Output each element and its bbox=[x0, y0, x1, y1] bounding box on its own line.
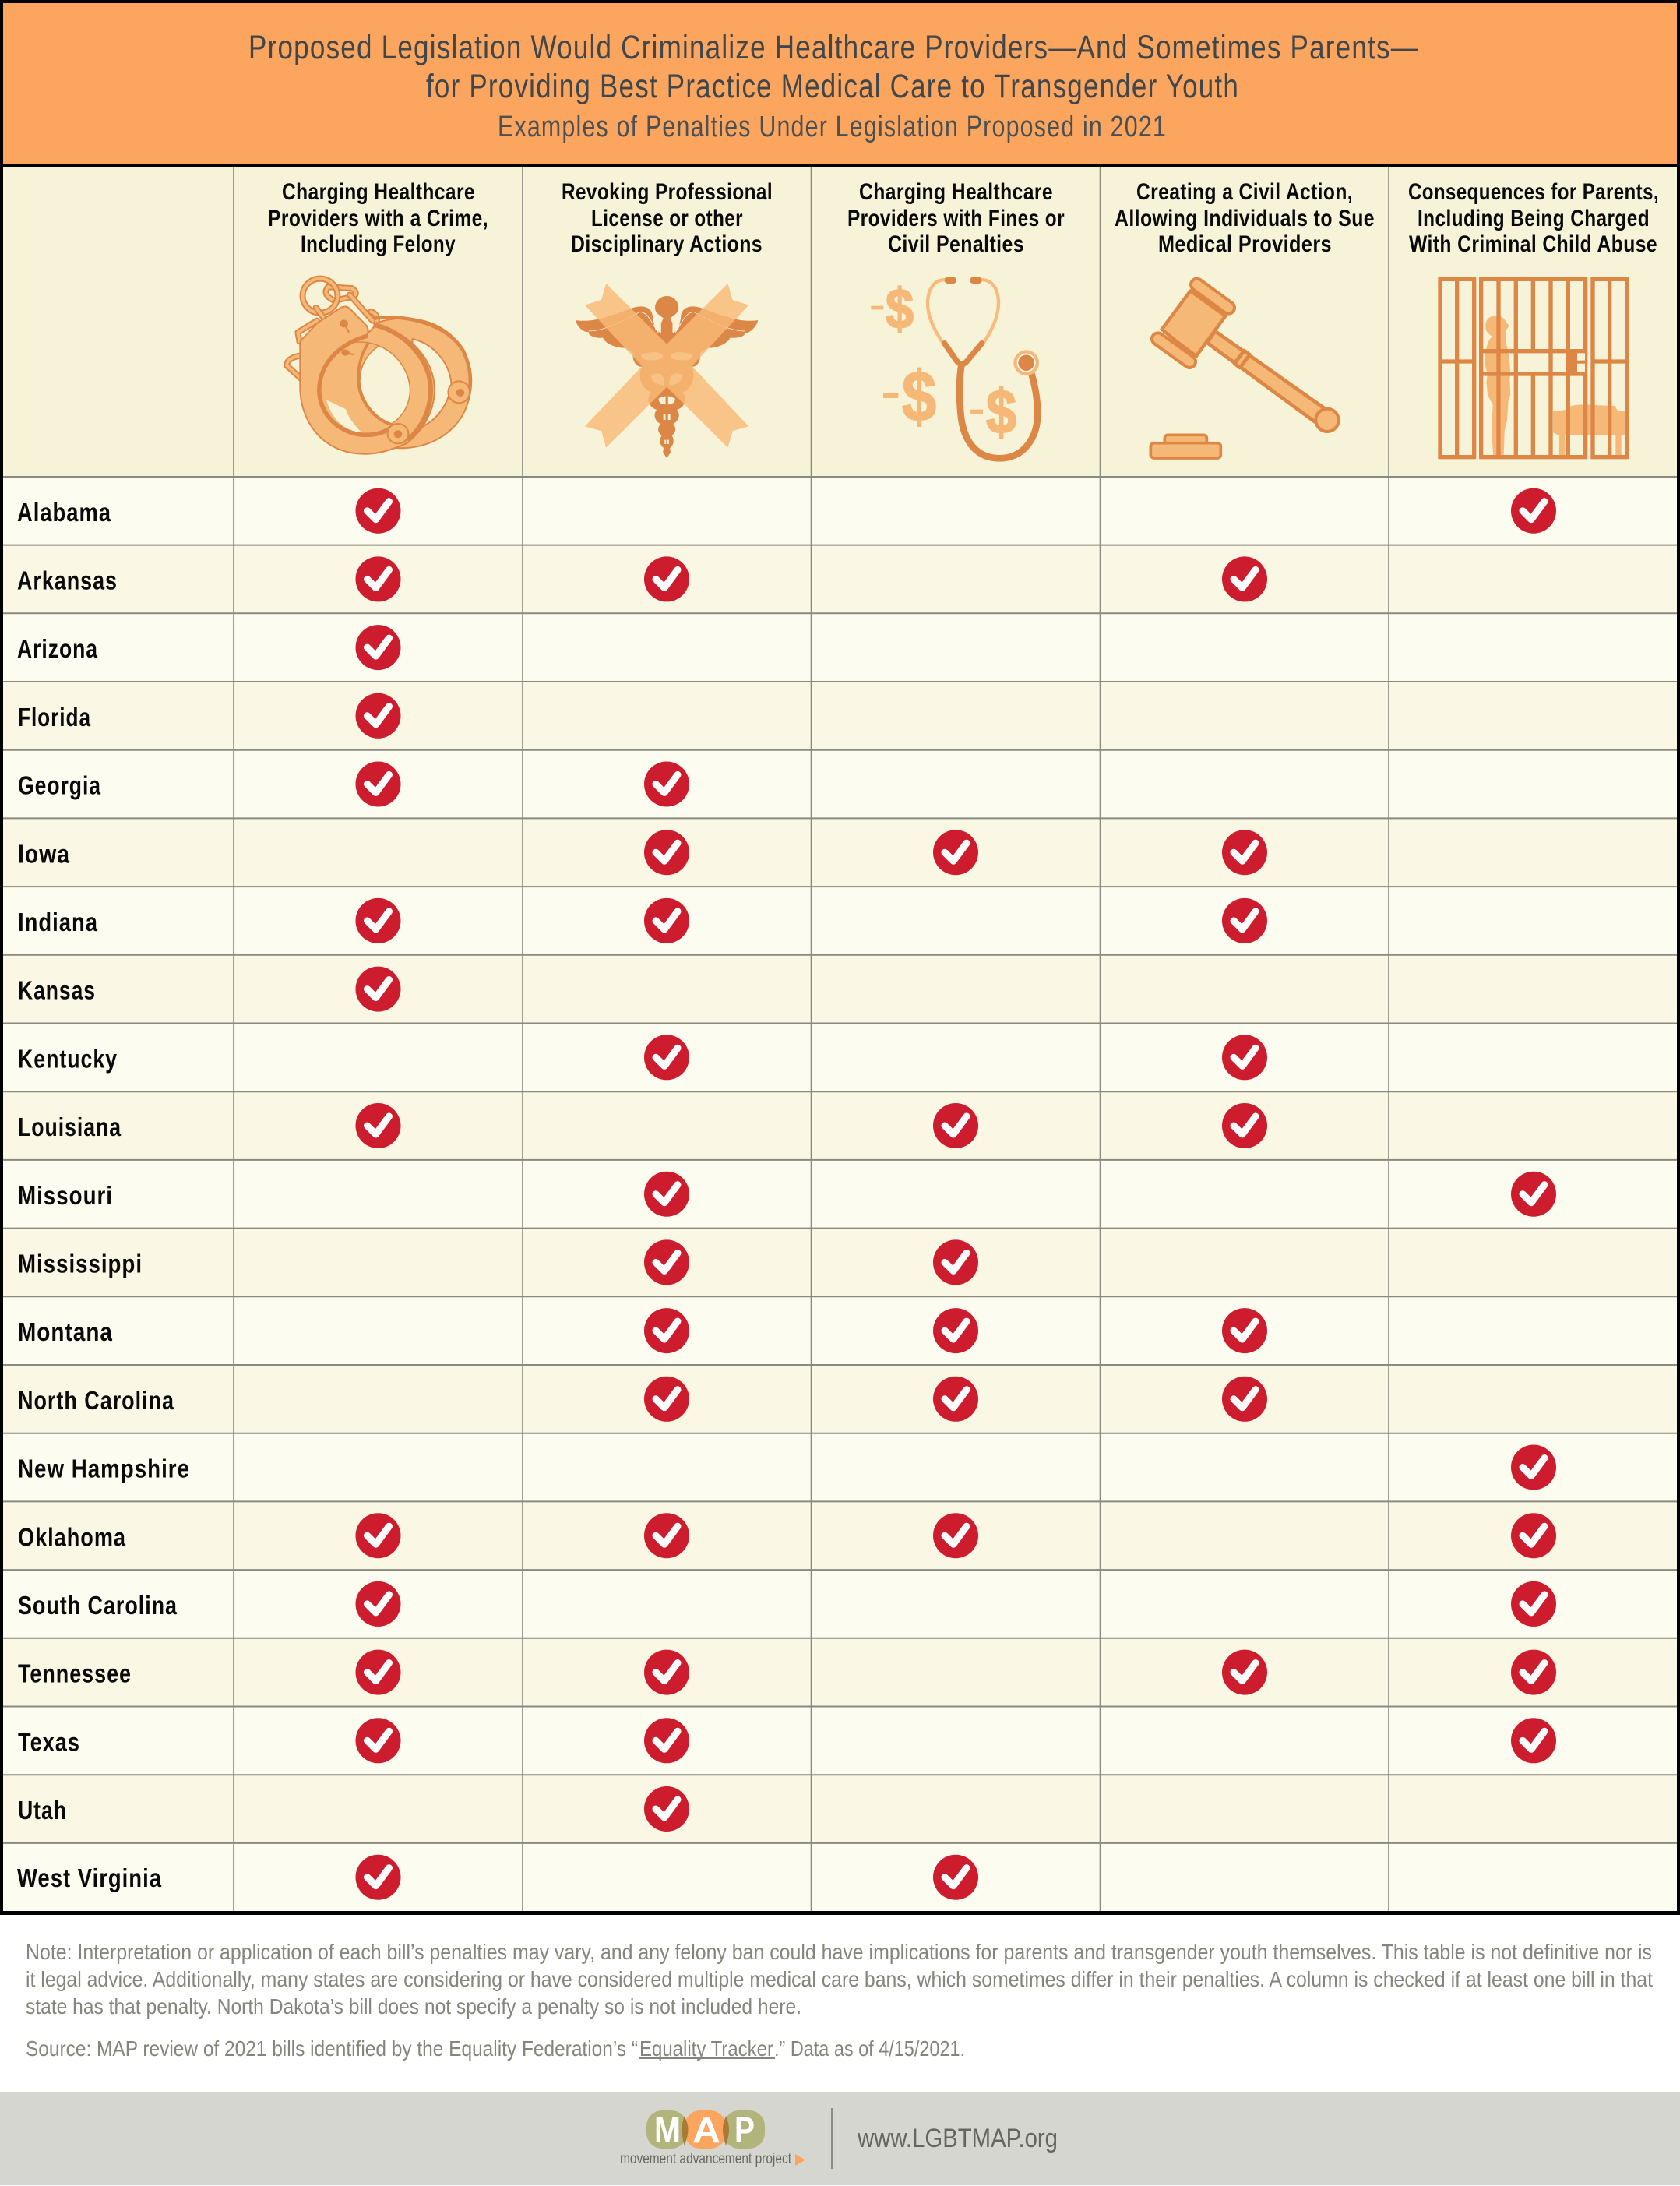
row: Oklahoma: Oklahoma bbox=[18, 1522, 126, 1551]
text block: note: state has that penalty. North Dakota’s bill does not specify a penalty so is not included here. bbox=[26, 1994, 801, 2019]
row: Kansas: Kansas bbox=[18, 976, 96, 1005]
row: Arkansas bbox=[17, 556, 1267, 601]
heading: fines or civil penalties: Providers with Fines or bbox=[847, 206, 1065, 231]
row: Arizona: Arizona bbox=[17, 634, 98, 663]
row: North Carolina: North Carolina bbox=[18, 1386, 174, 1415]
row: Florida bbox=[18, 693, 400, 739]
logo: MAP bbox=[620, 2110, 805, 2167]
row: Montana: Montana bbox=[18, 1317, 113, 1346]
icon: stethoscope with dollar signs: $ bbox=[902, 358, 936, 436]
row: Tennessee bbox=[18, 1650, 1556, 1695]
heading: charging with a crime: Charging Healthcare bbox=[282, 179, 475, 205]
heading: fines or civil penalties: Charging Healthcare bbox=[859, 179, 1053, 205]
icon: jail cell bbox=[1440, 279, 1627, 457]
heading: consequences for parents bbox=[1408, 179, 1659, 257]
icon: stethoscope with dollar signs: $ bbox=[986, 377, 1016, 446]
row: New Hampshire: New Hampshire bbox=[18, 1454, 190, 1483]
text block: source: .” Data as of 4/15/2021. bbox=[774, 2036, 965, 2061]
row: Oklahoma bbox=[18, 1513, 1556, 1558]
panel: title banner bbox=[0, 0, 1680, 167]
title: for Providing Best Practice Medical Care to Transgender Youth bbox=[426, 68, 1239, 105]
icon: stethoscope with dollar signs bbox=[871, 277, 1039, 458]
row: Mississippi bbox=[18, 1239, 978, 1285]
row: Kansas bbox=[18, 967, 400, 1012]
X overlay bbox=[585, 284, 748, 448]
row: South Carolina: South Carolina bbox=[18, 1591, 178, 1620]
row: Georgia: Georgia bbox=[18, 771, 101, 800]
icon: stethoscope with dollar signs: $ bbox=[886, 278, 914, 340]
heading: civil action: Allowing Individuals to Sue bbox=[1115, 206, 1375, 231]
row: West Virginia bbox=[17, 1855, 978, 1900]
row: Florida: Florida bbox=[18, 703, 91, 732]
heading: charging with a crime bbox=[268, 179, 488, 257]
row: West Virginia: West Virginia bbox=[17, 1863, 162, 1892]
row: Arkansas: Arkansas bbox=[17, 566, 118, 595]
row: Louisiana bbox=[18, 1103, 1267, 1148]
row: Texas: Texas bbox=[18, 1727, 80, 1756]
row: Iowa bbox=[18, 830, 1267, 875]
row: Utah: Utah bbox=[18, 1796, 67, 1825]
heading: civil action bbox=[1115, 179, 1375, 257]
heading: revoking license bbox=[562, 179, 773, 257]
title: Proposed Legislation Would Criminalize Healthcare Providers—And Sometimes Parents— bbox=[248, 29, 1419, 66]
heading: fines or civil penalties: Civil Penalties bbox=[888, 231, 1024, 257]
row: Missouri bbox=[18, 1172, 1556, 1217]
panel: footer bbox=[0, 2092, 1680, 2185]
heading: revoking license: Disciplinary Actions bbox=[571, 231, 763, 257]
heading: charging with a crime: Providers with a Crime, bbox=[268, 206, 488, 231]
row: Louisiana: Louisiana bbox=[18, 1112, 122, 1141]
heading: fines or civil penalties bbox=[847, 179, 1065, 257]
icon: caduceus crossed out bbox=[576, 284, 758, 458]
text block: source: Equality Tracker bbox=[639, 2036, 773, 2061]
logo: MAP: movement advancement project bbox=[620, 2151, 792, 2167]
website url: www.LGBTMAP.org bbox=[857, 2124, 1058, 2153]
title bbox=[248, 29, 1419, 105]
row: North Carolina bbox=[18, 1377, 1267, 1422]
row: Indiana: Indiana bbox=[18, 908, 98, 936]
row: South Carolina bbox=[18, 1581, 1556, 1627]
logo: MAP: M bbox=[654, 2110, 681, 2150]
row: Alabama bbox=[17, 488, 1556, 534]
row: New Hampshire bbox=[18, 1444, 1556, 1490]
logo: MAP: A bbox=[692, 2110, 720, 2150]
row: Iowa: Iowa bbox=[18, 839, 70, 868]
heading: civil action: Creating a Civil Action, bbox=[1136, 179, 1353, 205]
row: Indiana bbox=[18, 898, 1267, 943]
row: Texas bbox=[18, 1718, 1556, 1763]
row: Alabama: Alabama bbox=[17, 498, 111, 527]
row: Mississippi: Mississippi bbox=[18, 1250, 143, 1278]
icon: gavel bbox=[1150, 284, 1339, 458]
heading: civil action: Medical Providers bbox=[1158, 231, 1332, 257]
row: Arizona bbox=[17, 625, 400, 670]
row: Kentucky: Kentucky bbox=[18, 1044, 118, 1073]
row: Tennessee: Tennessee bbox=[18, 1659, 132, 1688]
icon: handcuffs bbox=[287, 279, 471, 454]
row: Kentucky bbox=[18, 1035, 1267, 1080]
logo: MAP: P bbox=[734, 2110, 755, 2150]
heading: revoking license: License or other bbox=[591, 206, 743, 231]
text block: source: Source: MAP review of 2021 bills identified by the Equality Federation’s “ bbox=[26, 2036, 638, 2061]
table body: state rows bbox=[0, 167, 1680, 1915]
row: Georgia bbox=[18, 762, 689, 807]
row: Utah bbox=[18, 1786, 689, 1832]
panel: table column headers bbox=[3, 167, 1677, 477]
row: Montana bbox=[18, 1308, 1267, 1353]
heading: charging with a crime: Including Felony bbox=[301, 231, 456, 257]
text block: note bbox=[26, 1940, 1653, 2019]
row: Missouri: Missouri bbox=[18, 1181, 113, 1210]
heading: revoking license: Revoking Professional bbox=[562, 179, 773, 205]
subtitle: Examples of Penalties Under Legislation Proposed in 2021 bbox=[498, 111, 1167, 143]
